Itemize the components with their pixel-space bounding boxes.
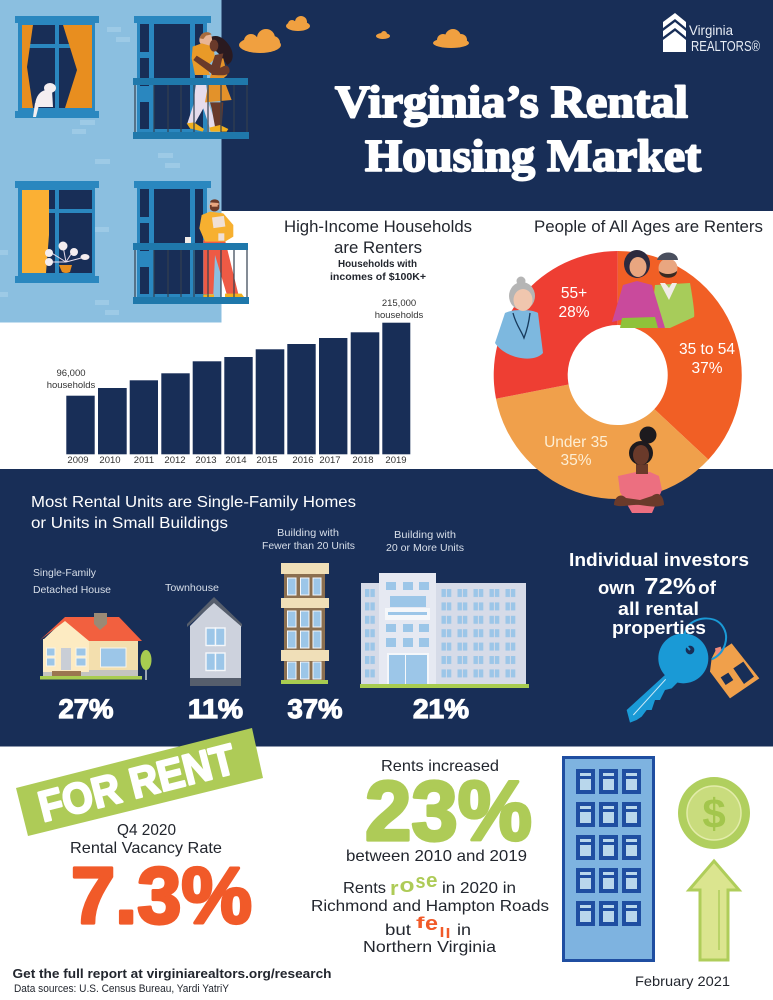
labels: unit types: Building with bbox=[394, 529, 456, 541]
icon: large apartment building bbox=[360, 573, 529, 688]
stat: rental vacancy rate: Q4 2020 bbox=[117, 822, 176, 839]
icon: potted flowers bbox=[45, 242, 90, 273]
text block: regional rent changes: Rents bbox=[343, 880, 386, 897]
text block: regional rent changes: o bbox=[400, 875, 414, 897]
labels: unit types: Single-Family bbox=[33, 567, 97, 579]
text block: regional rent changes: e bbox=[425, 913, 438, 935]
icon: dollar coin: $ bbox=[702, 790, 726, 837]
icon: up arrow bbox=[689, 861, 739, 960]
footer: report link bbox=[12, 966, 332, 995]
icon: single-family house bbox=[40, 613, 152, 680]
facade bricks bbox=[0, 27, 180, 315]
footer: report link: Data sources: U.S. Census Bureau, Yardi YatriY bbox=[14, 983, 230, 995]
logo: Virginia Realtors bbox=[663, 13, 760, 55]
bar chart: households by year: 215,000 bbox=[382, 298, 416, 309]
bar chart: households by year bbox=[47, 298, 424, 466]
heading: high-income households: Households with bbox=[338, 259, 417, 270]
donut chart: renters by age: 35% bbox=[560, 452, 592, 469]
heading: unit types: or Units in Small Buildings bbox=[31, 515, 228, 532]
donut chart: renters by age bbox=[494, 251, 742, 499]
bar chart: households by year: 2012 bbox=[164, 455, 186, 466]
donut chart: renters by age: 28% bbox=[558, 304, 590, 321]
percentages: unit types: 37% bbox=[288, 694, 342, 724]
bar chart: households by year: 2017 bbox=[319, 455, 341, 466]
text block: regional rent changes: in 2020 in bbox=[442, 880, 516, 897]
icon: dollar coin bbox=[678, 777, 750, 849]
sign: for rent: FOR RENT bbox=[34, 736, 240, 832]
callout: individual investors bbox=[569, 550, 749, 638]
balcony with embracing couple bbox=[133, 16, 249, 139]
callout: individual investors: 72% bbox=[644, 573, 696, 599]
text block: regional rent changes: Richmond and Hampton Roads bbox=[311, 898, 549, 915]
icon: blue apartment tower bbox=[564, 758, 654, 960]
donut chart: renters by age: 37% bbox=[691, 360, 723, 377]
callout: individual investors: properties bbox=[612, 618, 706, 638]
labels: unit types: 20 or More Units bbox=[386, 542, 464, 554]
stat: rental vacancy rate: Rental Vacancy Rate bbox=[70, 840, 222, 857]
donut chart: renters by age: Under 35 bbox=[544, 434, 608, 451]
callout: individual investors: Individual investors bbox=[569, 550, 749, 570]
bar chart: households by year: households bbox=[47, 380, 96, 391]
text block: regional rent changes: r bbox=[390, 878, 399, 900]
title: Virginia’s Rental bbox=[335, 77, 688, 127]
donut chart: renters by age: 55+ bbox=[561, 285, 587, 302]
text block: regional rent changes: but bbox=[385, 922, 412, 939]
bar chart: households by year: 2018 bbox=[352, 455, 374, 466]
heading: high-income households: incomes of $100K+ bbox=[330, 272, 426, 283]
heading: high-income households: High-Income Households bbox=[284, 218, 472, 236]
window with orange curtains and cat bbox=[15, 16, 99, 118]
bar chart: households by year: 2013 bbox=[195, 455, 217, 466]
percentages: unit types: 21% bbox=[413, 694, 469, 724]
icon: key with house tag bbox=[627, 618, 759, 723]
text block: regional rent changes: s bbox=[416, 871, 426, 893]
icon: young woman bbox=[614, 426, 664, 513]
panel: header background bbox=[221, 0, 773, 211]
icon: older woman bbox=[495, 276, 543, 359]
stat: rents increased: between 2010 and 2019 bbox=[346, 848, 527, 865]
icon: cat bbox=[33, 83, 56, 117]
text block: regional rent changes: in bbox=[457, 922, 471, 939]
bar chart: households by year: 2010 bbox=[99, 455, 121, 466]
panel: rental unit types background bbox=[0, 469, 773, 746]
labels: unit types bbox=[33, 527, 464, 596]
bar chart: households by year: 2014 bbox=[225, 455, 247, 466]
stat: rents increased: 23% bbox=[365, 764, 532, 858]
icon: middle-aged couple bbox=[612, 250, 694, 328]
bar chart: households by year: 2009 bbox=[67, 455, 89, 466]
heading: high-income households: are Renters bbox=[334, 239, 422, 257]
icon: townhouse bbox=[187, 597, 242, 686]
heading: high-income households bbox=[284, 218, 472, 283]
footer: date: February 2021 bbox=[635, 973, 730, 989]
icon: small apartment building bbox=[281, 563, 329, 684]
labels: unit types: Building with bbox=[277, 527, 339, 539]
bar chart: households by year: 96,000 bbox=[56, 368, 86, 379]
callout: individual investors: all rental bbox=[618, 599, 699, 619]
couple bbox=[187, 32, 233, 132]
text block: regional rent changes: l bbox=[440, 924, 444, 940]
stat: rents increased: Rents increased bbox=[381, 758, 499, 775]
clouds bbox=[239, 16, 469, 53]
labels: unit types: Fewer than 20 Units bbox=[262, 540, 355, 552]
labels: unit types: Townhouse bbox=[165, 582, 219, 594]
donut chart: renters by age: 35 to 54 bbox=[679, 341, 735, 358]
bar chart: households by year: 2015 bbox=[256, 455, 278, 466]
heading: unit types: Most Rental Units are Single-Family Homes bbox=[31, 494, 356, 511]
text block: regional rent changes: l bbox=[446, 925, 450, 941]
stat: rental vacancy rate: 7.3% bbox=[71, 851, 252, 940]
footer: report link: Get the full report at virginiarealtors.org/research bbox=[12, 966, 332, 981]
panel: light blue building facade bbox=[0, 0, 222, 322]
icon: cup on railing bbox=[185, 237, 191, 243]
callout: individual investors: of bbox=[698, 578, 717, 598]
percentages: unit types: 27% bbox=[58, 694, 114, 724]
man bbox=[199, 199, 244, 297]
bar chart: households by year: 2011 bbox=[134, 455, 154, 466]
heading: people of all ages: People of All Ages are Renters bbox=[534, 218, 763, 236]
heading: unit types bbox=[31, 494, 356, 532]
balcony with man holding a tablet bbox=[133, 181, 249, 304]
text block: regional rent changes: e bbox=[426, 870, 438, 892]
text block: regional rent changes: f bbox=[416, 915, 426, 932]
title: Housing Market bbox=[365, 131, 701, 181]
text block: regional rent changes bbox=[311, 870, 549, 956]
callout: individual investors: own bbox=[598, 578, 635, 598]
window with yellow curtain and flowers bbox=[15, 181, 99, 283]
bar chart: households by year: households bbox=[375, 310, 424, 321]
percentages: unit types: 11% bbox=[188, 694, 243, 724]
title bbox=[335, 77, 701, 181]
percentages: unit types bbox=[58, 694, 469, 724]
bar chart: households by year: 2019 bbox=[385, 455, 407, 466]
labels: unit types: Detached House bbox=[33, 584, 111, 596]
bar chart: households by year: 2016 bbox=[292, 455, 314, 466]
logo: Virginia Realtors: Virginia bbox=[689, 22, 733, 38]
text block: regional rent changes: Northern Virginia bbox=[363, 939, 496, 956]
